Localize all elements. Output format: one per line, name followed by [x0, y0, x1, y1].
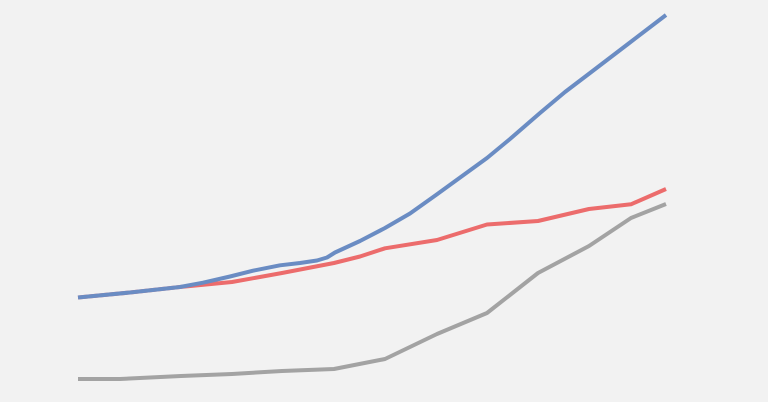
line: red series [78, 189, 666, 298]
line: blue series [78, 15, 666, 298]
line: gray series [78, 204, 666, 379]
